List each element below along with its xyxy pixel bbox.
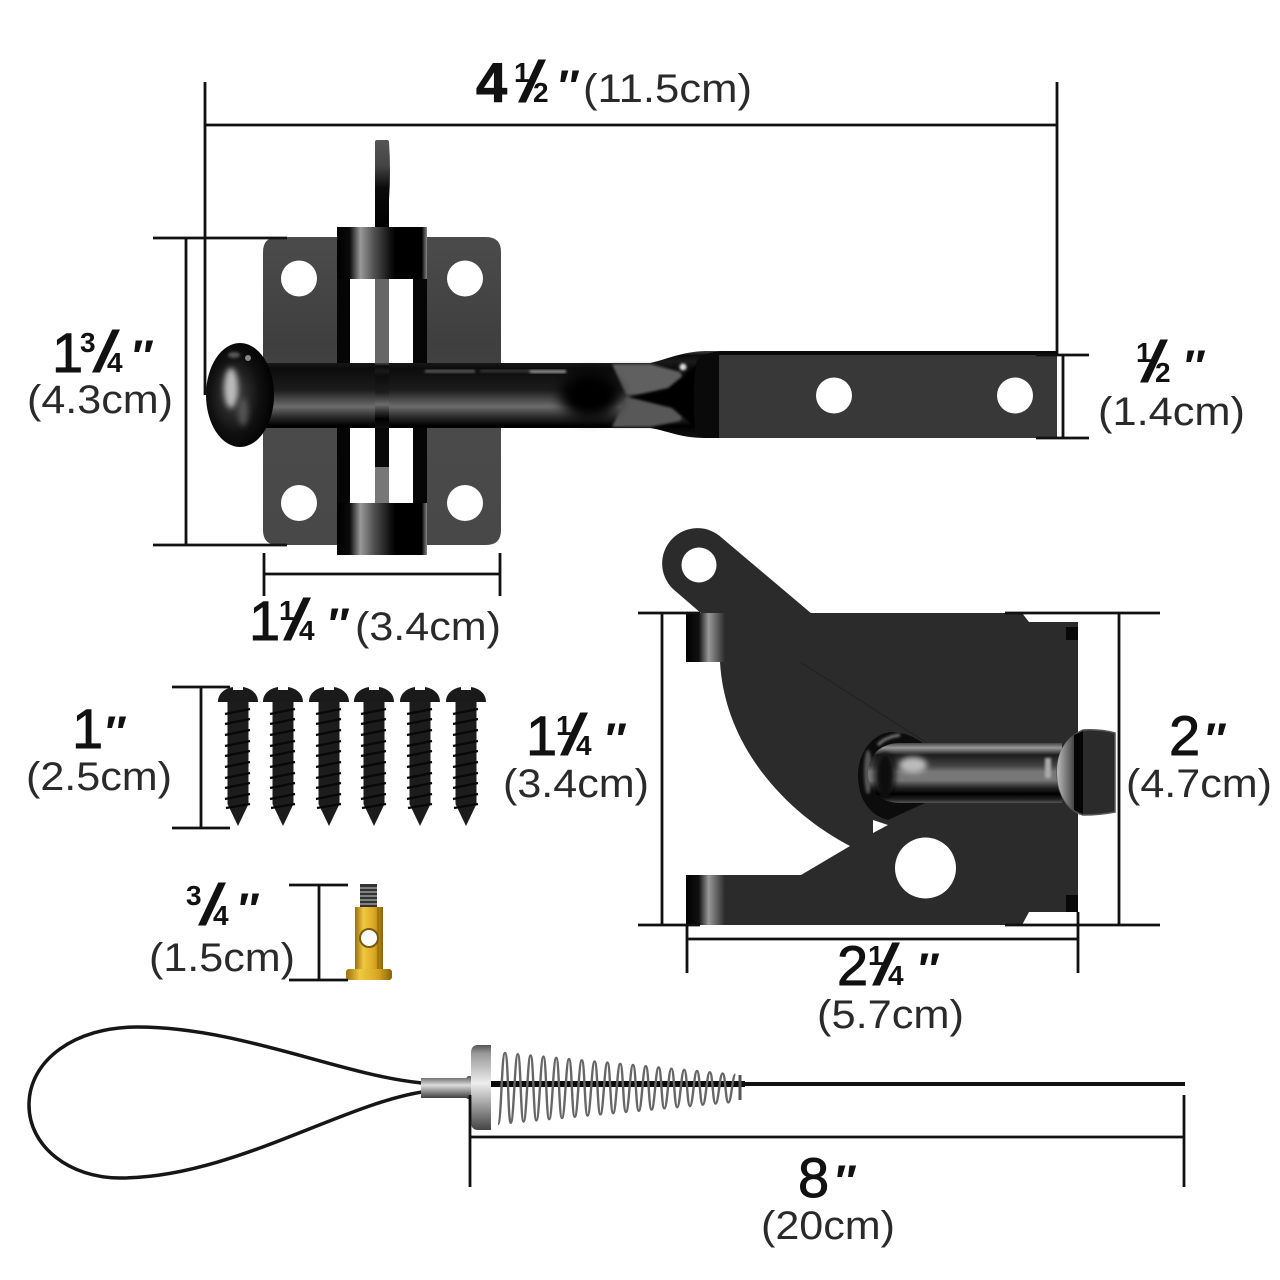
label: 1 inch: [72, 697, 127, 760]
label: 1/2 inch: /: [1140, 330, 1170, 395]
dimension: plate width: [249, 553, 501, 653]
dimension: catch height right: [1005, 613, 1272, 925]
label: 4 1/2 inch: ″: [556, 61, 580, 112]
label: 4 1/2 inch: 4: [476, 51, 507, 114]
label: 4 1/2 inch: 2: [533, 77, 549, 108]
dimension: pin height: [149, 873, 348, 980]
label: 1 1/4 inch: 4: [576, 730, 592, 761]
dimension: overall latch width: [205, 50, 1057, 395]
label: 1.5cm: (1.5cm): [149, 936, 295, 980]
label: 4 1/2 inch: [476, 50, 580, 115]
catch body with mounting hole: [686, 613, 1078, 925]
label: 1/2 inch: 1: [1136, 337, 1152, 368]
label: 1 3/4 inch: [52, 320, 154, 385]
label: 1 1/4 inch: [249, 588, 350, 653]
label: 20cm: (20cm): [761, 1204, 895, 1248]
dimension: arm width: [1036, 330, 1245, 438]
label: 1 1/4 inch: ″: [326, 599, 350, 650]
dimension: catch width: [687, 912, 1078, 1037]
label: 2 1/4 inch: 1: [868, 940, 884, 971]
label: 3/4 inch: 3: [186, 880, 202, 911]
label: 4.3cm: (4.3cm): [27, 378, 173, 422]
label: 1 1/4 inch: /: [560, 703, 590, 768]
label: 1.4cm: (1.4cm): [1098, 390, 1245, 434]
upper bracket: [337, 227, 427, 279]
label: 8 inch: ″: [833, 1156, 857, 1207]
label: 5.7cm: (5.7cm): [817, 993, 964, 1037]
gate catch assembly: [662, 528, 1115, 925]
cable ferrule: [421, 1076, 473, 1099]
label: 2 inch: 2: [1169, 704, 1200, 767]
flat mounting arm with two holes: [694, 351, 1057, 438]
vertical catch tab: [375, 140, 390, 227]
pin elbow: [858, 732, 925, 820]
spring end clip: [738, 1075, 742, 1100]
dimension: cable length: [470, 1095, 1184, 1248]
pin shaft: [868, 743, 1062, 803]
label: 1 1/4 inch: 1: [526, 704, 557, 767]
label: 3/4 inch: ″: [236, 884, 260, 935]
label: 2 inch: [1169, 704, 1227, 767]
dimension: plate height: [27, 238, 287, 545]
coil spring: [498, 1053, 735, 1124]
label: 1/2 inch: ″: [1182, 341, 1206, 392]
lower bracket: [337, 503, 427, 555]
label: 3/4 inch: /: [198, 873, 228, 938]
dimension: screw length: [26, 687, 230, 828]
pin highlights: [875, 753, 1051, 797]
inner edge line: [800, 662, 930, 745]
label: 2 1/4 inch: [837, 933, 940, 998]
bolt shaft and flared neck: [265, 351, 730, 438]
label: 1 3/4 inch: /: [92, 320, 122, 385]
label: 4.7cm: (4.7cm): [1126, 762, 1272, 806]
label: 2 1/4 inch: 4: [888, 960, 904, 991]
label: 2 1/4 inch: /: [872, 933, 902, 998]
centre tab over bolt: [375, 279, 389, 503]
cable outer section: [742, 1082, 1185, 1086]
label: 1 inch: 1: [72, 697, 103, 760]
pull cable with spring: [29, 1027, 1185, 1178]
gate latch bolt assembly: [206, 140, 1057, 555]
bolt elbow shading: [560, 362, 700, 432]
washer head: [471, 1045, 491, 1130]
label: 1 1/4 inch: 1: [279, 595, 295, 626]
upper curled tube: [686, 613, 725, 662]
dimension: catch height left: [503, 613, 700, 925]
cable loop: [29, 1027, 422, 1178]
label: 1/2 inch: 2: [1155, 357, 1171, 388]
pivot tab with hole: [662, 528, 812, 614]
right edge dark strips: [1066, 627, 1078, 912]
mounting plate with four holes: [263, 237, 501, 545]
label: 1 3/4 inch: ″: [130, 331, 154, 382]
label: 8 inch: 8: [798, 1146, 829, 1209]
label: 1 1/4 inch: ″: [603, 714, 627, 765]
slot and side bars: [337, 279, 427, 503]
label: 3/4 inch: 4: [213, 900, 229, 931]
label: 2 1/4 inch: ″: [916, 944, 940, 995]
label: 2 inch: ″: [1203, 714, 1227, 765]
lower curled tube: [686, 875, 725, 925]
label: 1 1/4 inch: 1: [249, 589, 280, 652]
bolt knob: [206, 343, 274, 447]
label: 3.4cm: (3.4cm): [355, 605, 501, 649]
pin end knob: [1057, 730, 1115, 815]
bolt highlights: [425, 370, 566, 373]
label: 3.4cm: (3.4cm): [503, 762, 649, 806]
label: 4 1/2 inch: 1: [514, 57, 530, 88]
label: 1 inch: ″: [103, 707, 127, 758]
label: 8 inch: [798, 1146, 857, 1209]
label: 1 3/4 inch: 1: [52, 321, 83, 384]
label: 1 3/4 inch: 4: [107, 347, 123, 378]
label: 3/4 inch: [186, 873, 260, 938]
label: 1/2 inch: [1136, 330, 1206, 395]
label: 1 1/4 inch: 1: [556, 710, 572, 741]
label: 1 1/4 inch: [526, 703, 627, 768]
label: 4 1/2 inch: /: [518, 50, 548, 115]
label: 1 3/4 inch: 3: [80, 327, 96, 358]
cable inner section: [491, 1081, 745, 1087]
label: 1 1/4 inch: /: [283, 588, 313, 653]
label: 11.5cm: (11.5cm): [583, 67, 752, 111]
brass shoulder pin: [346, 884, 392, 980]
label: 1 1/4 inch: 4: [299, 615, 315, 646]
white notch: [873, 820, 888, 833]
label: 2.5cm: (2.5cm): [26, 755, 172, 799]
label: 2 1/4 inch: 2: [837, 934, 868, 997]
six mounting screws: [218, 687, 486, 826]
